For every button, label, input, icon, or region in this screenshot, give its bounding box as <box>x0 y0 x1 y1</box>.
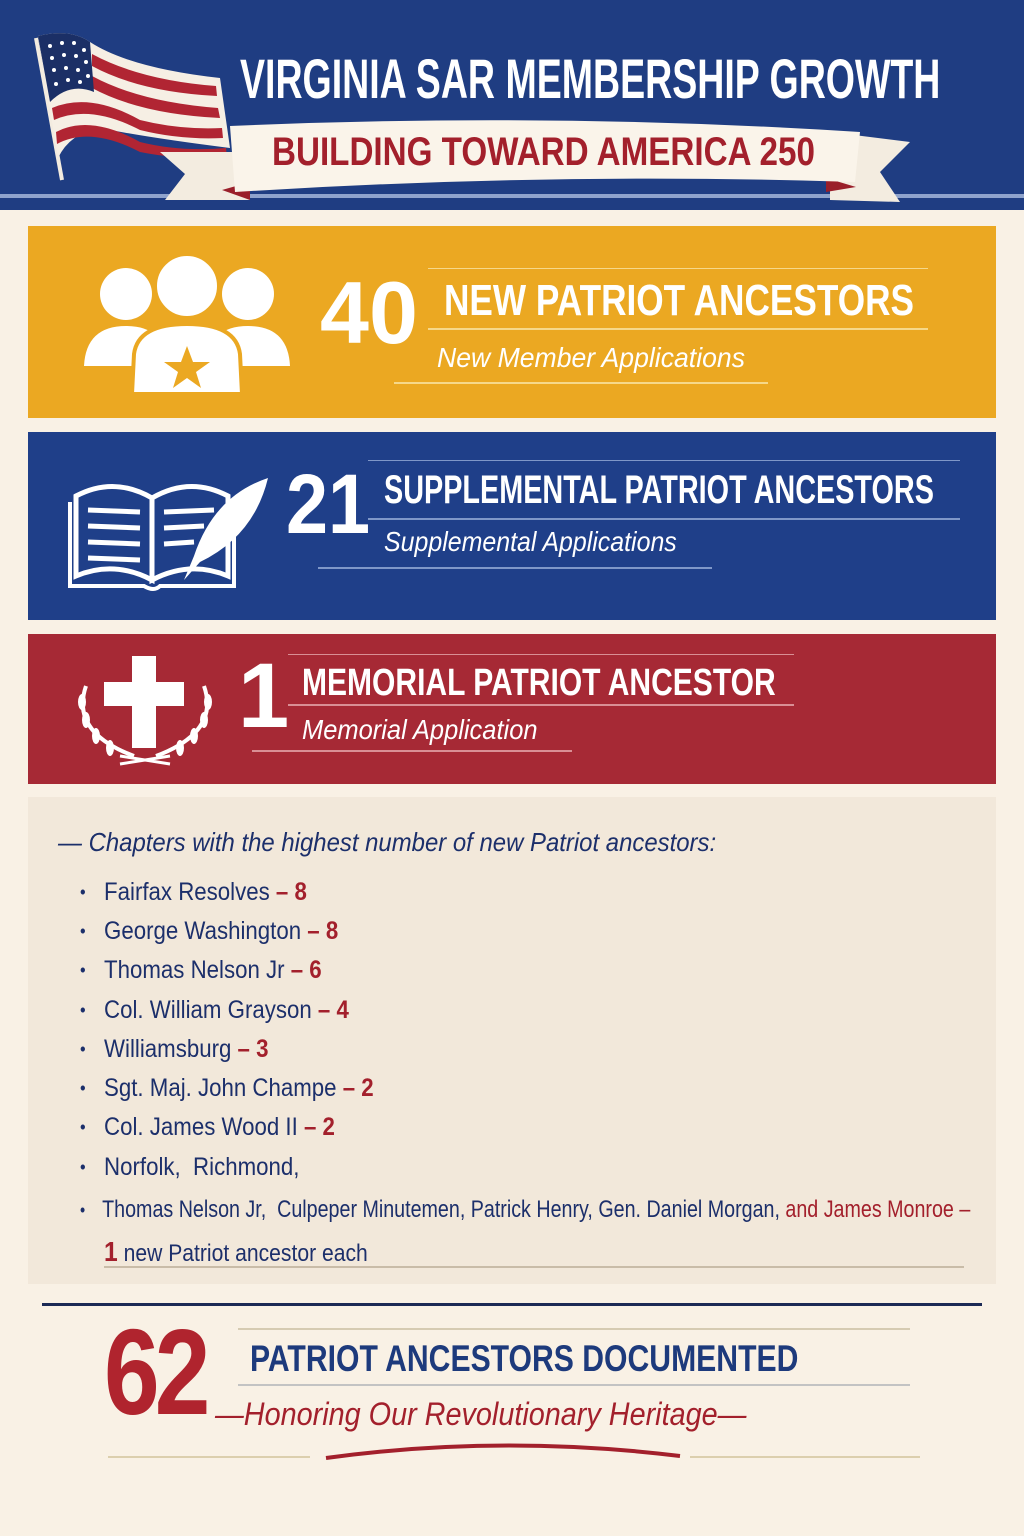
list items: Thomas Nelson Jr, Culpeper Minutemen, Patrick Henry, Gen. Daniel Morgan, and James Monroe – <box>102 1196 970 1223</box>
heading: SUPPLEMENTAL PATRIOT ANCESTORS <box>384 468 934 512</box>
total summary <box>104 1304 920 1460</box>
panel: new patriot ancestors <box>28 226 996 418</box>
subtext: New Member Applications <box>437 342 745 373</box>
divider <box>42 1303 982 1306</box>
icon: group with star <box>84 256 290 392</box>
list items: Sgt. Maj. John Champe – 2 <box>104 1074 374 1102</box>
list items: Col. James Wood II – 2 <box>104 1113 335 1141</box>
list items: Thomas Nelson Jr – 6 <box>104 956 322 984</box>
list items: Col. William Grayson – 4 <box>104 996 349 1024</box>
heading: MEMORIAL PATRIOT ANCESTOR <box>302 662 776 704</box>
header band <box>0 0 1024 210</box>
list heading: — Chapters with the highest number of new Patriot ancestors: <box>58 827 716 857</box>
tagline: —Honoring Our Revolutionary Heritage— <box>215 1396 746 1432</box>
subtitle ribbon <box>160 120 910 202</box>
list items: Fairfax Resolves – 8 <box>104 878 307 906</box>
number: 21 <box>286 457 370 551</box>
decorative stripe <box>0 194 1024 198</box>
panel: chapter list <box>28 797 996 1284</box>
icon: american flag <box>34 33 230 180</box>
subtitle ribbon: BUILDING TOWARD AMERICA 250 <box>272 130 815 174</box>
list items: 1 new Patriot ancestor each <box>104 1236 368 1267</box>
list items: Williamsburg – 3 <box>104 1035 268 1063</box>
panel: memorial <box>28 634 996 784</box>
heading: NEW PATRIOT ANCESTORS <box>444 276 914 325</box>
number: 1 <box>238 645 289 747</box>
total number: 62 <box>104 1304 205 1440</box>
subtext: Memorial Application <box>302 714 538 745</box>
list items: Norfolk, Richmond, <box>104 1153 299 1181</box>
subtext: Supplemental Applications <box>384 526 677 557</box>
total heading: PATRIOT ANCESTORS DOCUMENTED <box>250 1338 798 1379</box>
list items: George Washington – 8 <box>104 917 338 945</box>
title: VIRGINIA SAR MEMBERSHIP GROWTH <box>240 47 940 110</box>
panel: supplemental <box>28 432 996 620</box>
number: 40 <box>320 263 418 362</box>
icon: cross with wreath <box>78 656 212 766</box>
icon: book and quill <box>68 478 268 591</box>
